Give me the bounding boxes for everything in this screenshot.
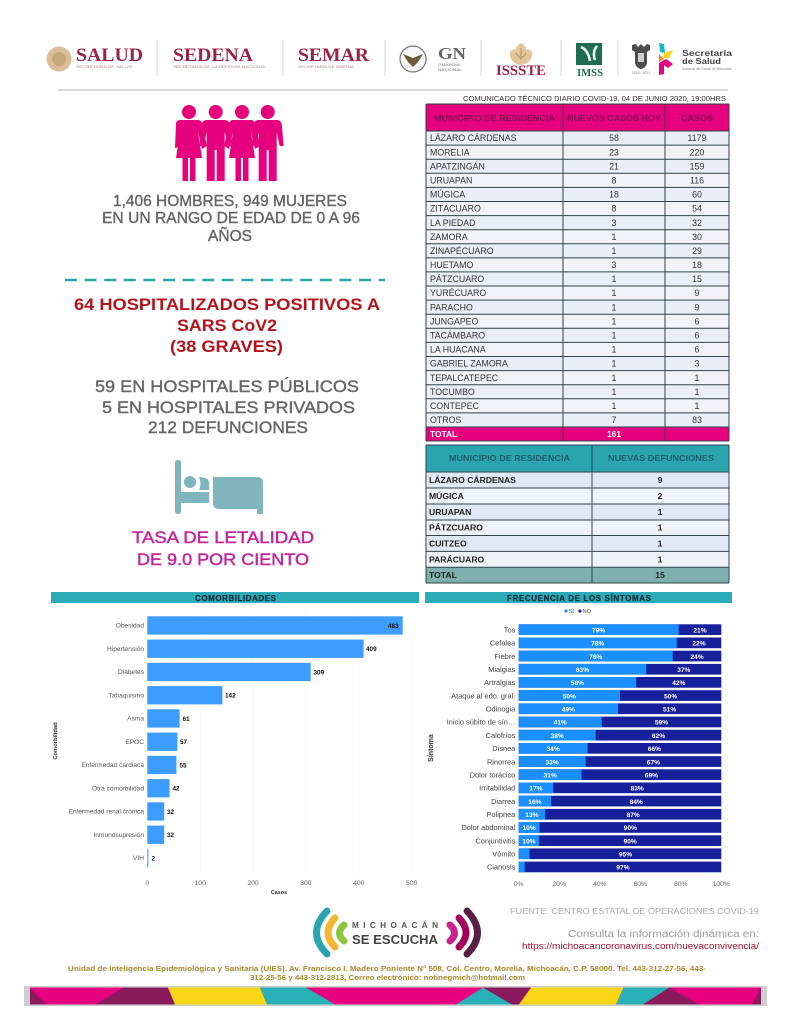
stacked bar chart: síntomas: 41% [554,720,567,727]
stacked bar chart: síntomas [428,624,730,888]
stacked bar chart: síntomas: 50% [563,693,576,700]
table: casos por municipio: TEPALCATEPEC [430,373,499,383]
text: hospitales y defunciones: 5 EN HOSPITALES PRIVADOS [102,398,355,417]
table: casos por municipio: 1 [612,330,617,340]
stacked bar chart: síntomas: Mialgias [488,665,516,674]
text: consulta la información: Consulta la información dinámica en: [568,929,759,940]
table: casos por municipio: MÚGICA [430,190,465,200]
stacked bar chart: síntomas: Fiebre [494,652,515,661]
table: nuevas defunciones: 9 [658,475,663,485]
bar chart: comorbilidades: 32 [167,809,175,816]
stacked bar chart: síntomas: Calofríos [486,731,516,740]
table: casos por municipio: PARACHO [430,302,473,312]
logo: Salud [46,46,143,72]
table: casos por municipio: ZITÁCUARO [430,204,481,214]
logo: IMSS [576,43,603,79]
decorative stripe [24,986,767,1006]
bar chart: comorbilidades: Enfermedad cardiaca [81,762,144,769]
table: casos por municipio: 1 [695,373,700,383]
table: casos por municipio: 1 [612,401,617,411]
stacked bar chart: síntomas: 17% [529,786,543,793]
text: hospitalizados: SARS CoV2 [177,316,277,335]
table: casos por municipio: 1 [612,232,617,242]
table: casos por municipio: 29 [692,246,702,256]
table: casos por municipio: LÁZARO CÁRDENAS [430,133,517,143]
bar chart: comorbilidades: 55 [180,762,187,770]
table: casos por municipio: 1 [612,359,617,369]
bar chart: comorbilidades: Inmunosupresión [93,832,144,839]
stacked bar chart: síntomas: Dolor abdominal [461,823,516,832]
table: casos por municipio: CASOS [681,113,713,123]
stacked bar chart: síntomas: 90% [624,838,637,845]
table: casos por municipio: 23 [609,147,619,157]
table: casos por municipio: CONTEPEC [430,401,480,411]
table: nuevas defunciones: PÁTZCUARO [429,522,483,532]
table: casos por municipio: 7 [612,415,617,425]
logo: ISSSTE: ISSSTE [496,63,546,79]
table: casos por municipio: TACÁMBARO [430,330,485,340]
heading: frecuencia de los síntomas: FRECUENCIA DE LOS SÍNTOMAS [507,594,652,603]
bar chart: comorbilidades: EPOC [125,739,144,746]
table: casos por municipio: 220 [690,147,704,157]
table: casos por municipio: MUNICIPIO DE RESIDENCIA [434,113,555,123]
stacked bar chart: síntomas: 58% [571,680,584,687]
bar chart: comorbilidades: 500 [406,880,418,887]
table: casos por municipio: 3 [612,218,617,228]
stacked bar chart: síntomas: 37% [677,667,691,674]
stacked bar chart: síntomas: 42% [672,680,686,687]
table: casos por municipio: 1 [612,274,617,284]
table: casos por municipio: 8 [612,176,617,186]
table: casos por municipio: JUNGAPEO [430,316,479,326]
stacked bar chart: síntomas: 38% [551,733,564,740]
stacked bar chart: síntomas: 66% [648,746,661,753]
header logos [46,40,732,79]
stacked bar chart: síntomas: 21% [693,627,707,634]
bar chart: comorbilidades: 409 [366,646,377,653]
stacked bar chart: síntomas: 34% [546,746,560,753]
table: casos por municipio: 9 [695,288,700,298]
logo: Sedena: SEDENA [173,46,254,66]
table: casos por municipio: 1 [612,373,617,383]
logo: Michoacán shield: 2015 · 2021 [632,71,650,75]
stacked bar chart: síntomas: 40% [593,881,607,888]
date line: COMUNICADO TÉCNICO DIARIO COVID-19, 04 DE JUNIO 2020, 19:00HRS [463,94,726,103]
bar chart: comorbilidades: Enfermedad renal crónica [68,809,144,816]
text: enlace: https://michoacancoronavirus.com/nuevaconvivencia/ [522,941,759,952]
logo: Michoacán shield [632,44,650,75]
stacked bar chart: síntomas: 10% [522,825,536,832]
stacked bar chart: síntomas: 51% [663,706,676,714]
table: casos por municipio: 1 [612,387,617,397]
text: hombres y mujeres: AÑOS [208,225,252,245]
bar chart: comorbilidades: Otra comorbilidad [92,785,144,792]
heading: comorbilidades [51,592,419,603]
logo: Guardia Nacional: NACIONAL [438,67,463,72]
logo: Guardia Nacional: GUARDIA [438,62,460,67]
stacked bar chart: síntomas: 76% [589,654,602,661]
table: casos por municipio [426,104,729,441]
legend: SI NO: SI [568,609,574,615]
logo: IMSS: IMSS [577,67,603,79]
stacked bar chart: síntomas: 100% [713,881,730,888]
table: casos por municipio: 1 [612,288,617,298]
table: nuevas defunciones: MUNICIPIO DE RESIDENCIA [449,453,570,463]
stacked bar chart: síntomas: 69% [645,772,658,779]
bar chart: comorbilidades: Casos [271,890,287,896]
table: nuevas defunciones: 15 [655,570,665,580]
logo: ISSSTE [496,43,546,79]
logo: Secretaría de Salud mark: Secretaría [682,48,732,58]
table: casos por municipio: 83 [692,415,702,425]
table: casos por municipio: 3 [695,359,700,369]
stacked bar chart: síntomas: 63% [576,667,589,674]
table: nuevas defunciones: CUITZEO [429,538,467,548]
table: casos por municipio: LA PIEDAD [430,218,475,228]
stacked bar chart: síntomas: Cefalea [490,639,516,648]
table: casos por municipio: 1 [612,246,617,256]
table: casos por municipio: YURÉCUARO [430,288,486,298]
table: casos por municipio: 1 [695,387,700,397]
table: casos por municipio: 30 [692,232,702,242]
stacked bar chart: síntomas: 84% [630,799,643,806]
stacked bar chart: síntomas: 16% [528,799,542,806]
stacked bar chart: síntomas: 67% [647,759,660,766]
stacked bar chart: síntomas: 33% [545,759,559,766]
stacked bar chart: síntomas: Artralgias [484,678,516,687]
icon: bed [175,460,263,514]
text: dirección: 312-25-56 y 443-312-2813, Correo electrónico: notinegmich@hotmail.com [250,973,525,982]
text: tasa de letalidad: TASA DE LETALIDAD [132,528,314,547]
bar chart: comorbilidades: 61 [182,716,190,723]
stacked bar chart: síntomas: 90% [624,825,637,832]
table: casos por municipio: 1 [695,401,700,411]
table: casos por municipio: 161 [607,429,621,439]
bar chart: comorbilidades: Tabaquismo [108,692,144,699]
table: nuevas defunciones [426,445,729,583]
table: casos por municipio: 6 [695,316,700,326]
heading: frecuencia de los síntomas [425,592,732,603]
table: nuevas defunciones: NUEVAS DEFUNCIONES [608,453,714,463]
table: casos por municipio: NUEVOS CASOS HOY [567,113,661,123]
bar chart: comorbilidades: 32 [167,832,175,839]
table: casos por municipio: 8 [612,204,617,214]
table: casos por municipio: 116 [690,176,704,186]
stacked bar chart: síntomas: Inicio súbito de sín… [447,718,515,727]
table: casos por municipio: OTROS [430,415,461,425]
legend: SI NO: NO [582,609,592,615]
logo: Michoacán se escucha [316,911,478,954]
table: nuevas defunciones: 1 [658,538,663,548]
table: casos por municipio: 54 [692,204,702,214]
bar chart: comorbilidades: Asma [127,716,144,723]
logo: Salud: SECRETARÍA DE SALUD [76,65,133,69]
table: casos por municipio: APATZINGÁN [430,161,485,171]
stacked bar chart: síntomas: Tos [504,625,516,634]
table: casos por municipio: 15 [692,274,702,284]
stacked bar chart: síntomas: Conjuntivitis [475,836,516,845]
stacked bar chart: síntomas: Polipnea [487,810,516,819]
table: casos por municipio: TOCUMBO [430,387,475,397]
table: casos por municipio: 1 [612,316,617,326]
bar chart: comorbilidades: 400 [353,880,365,887]
stacked bar chart: síntomas: 0% [514,881,524,888]
table: casos por municipio: 18 [609,190,619,200]
text: hospitalizados [74,295,380,356]
bar chart: comorbilidades: Diabetes [118,669,145,676]
table: casos por municipio: MORELIA [430,147,470,157]
bar chart: comorbilidades: Obesidad [116,623,144,630]
text: dirección: Unidad de Inteligencia Epidemiológica y Sanitaria (UIES). Av. Francisco I. Madero Poniente N° 508, Col. Centro, Morelia, Michoacán, C.P. 58000. Tel. 443-312-27-56, 443- [68,964,706,973]
table: casos por municipio: HUETAMO [430,260,473,270]
stacked bar chart: síntomas: Odinogia [486,704,516,714]
heading: comorbilidades: COMORBILIDADES [195,594,277,603]
stacked bar chart: síntomas: Ataque al edo. gral. [451,691,515,700]
table: casos por municipio: 9 [695,302,700,312]
logo: Secretaría de Salud mark [659,43,732,75]
table: nuevas defunciones: 1 [658,554,663,564]
table: nuevas defunciones: MÚGICA [429,490,464,501]
stacked bar chart: síntomas: Cianosis [487,863,516,872]
text: tasa de letalidad: DE 9.0 POR CIENTO [137,550,309,569]
text: hospitales y defunciones: 59 EN HOSPITALES PÚBLICOS [95,377,359,396]
stacked bar chart: síntomas: 31% [543,772,557,779]
table: casos por municipio: URUAPAN [430,176,472,186]
logo: Sedena: SECRETARÍA DE LA DEFENSA NACIONAL [173,65,266,69]
stacked bar chart: síntomas: Irritabilidad [479,784,515,793]
table: casos por municipio: GABRIEL ZAMORA [430,359,508,369]
logo: Secretaría de Salud mark: de Salud [682,56,721,66]
stacked bar chart: síntomas: Disnea [492,744,516,753]
table: casos por municipio: 60 [692,190,702,200]
stacked bar chart: síntomas: Diarrea [491,797,516,806]
stacked bar chart: síntomas: 22% [692,641,706,648]
logo: Salud: SALUD [76,46,143,66]
bar chart: comorbilidades: VIH [133,855,144,862]
icon: four people [175,105,284,181]
table: casos por municipio: 1179 [688,133,707,143]
stacked bar chart: síntomas: 97% [616,865,630,872]
table: casos por municipio: ZAMORA [430,232,468,242]
stacked bar chart: síntomas: Dolor torácico [470,770,515,779]
text: hospitalizados: (38 GRAVES) [170,337,283,356]
table: nuevas defunciones: 1 [658,522,663,532]
bar chart: comorbilidades: 309 [314,670,325,676]
text: hombres y mujeres [102,193,360,245]
bar chart: comorbilidades: 57 [180,739,188,746]
table: casos por municipio: PÁTZCUARO [430,274,484,284]
bar chart: comorbilidades: 200 [247,880,259,887]
bar chart: comorbilidades: 142 [225,693,236,700]
stacked bar chart: síntomas: 95% [619,852,632,858]
text: hombres y mujeres: 1,406 HOMBRES, 949 MUJERES [113,193,347,210]
table: nuevas defunciones: PARÁCUARO [429,554,485,564]
stacked bar chart: síntomas: 10% [522,838,536,845]
stacked bar chart: síntomas: 60% [633,881,647,888]
stacked bar chart: síntomas: 24% [690,654,704,661]
table: casos por municipio: 18 [692,260,702,270]
logo: Guardia Nacional [400,44,467,72]
table: nuevas defunciones: LÁZARO CÁRDENAS [429,475,516,485]
table: nuevas defunciones: URUAPAN [429,507,471,517]
bar chart: comorbilidades: Hipertensión [107,646,144,653]
stacked bar chart: síntomas: 87% [627,812,640,819]
bar chart: comorbilidades: 100 [195,880,206,887]
text: dirección [68,964,706,982]
logo: Guardia Nacional: GN [438,44,467,63]
table: nuevas defunciones: TOTAL [429,570,457,580]
stacked bar chart: síntomas: 62% [652,733,665,740]
table: casos por municipio: ZINAPÉCUARO [430,246,494,256]
table: casos por municipio: TOTAL [430,429,457,439]
bar chart: comorbilidades: 483 [388,623,399,630]
stacked bar chart: síntomas: 78% [591,641,604,648]
text: hospitalizados: 64 HOSPITALIZADOS POSITIVOS A [74,295,380,314]
table: casos por municipio: 6 [695,330,700,340]
text: tasa de letalidad [132,528,314,569]
text: fuente: FUENTE: CENTRO ESTATAL DE OPERACIONES COVID-19 [510,906,759,916]
stacked bar chart: síntomas: 80% [674,881,688,888]
text: hospitales y defunciones [95,377,359,437]
logo: Michoacán se escucha: MICHOACÁN [352,920,438,930]
stacked bar chart: síntomas: 49% [562,706,575,714]
table: casos por municipio: 6 [695,345,700,355]
table: casos por municipio: LA HUACANA [430,345,486,355]
table: casos por municipio: 32 [692,218,702,228]
stacked bar chart: síntomas: 79% [592,627,605,634]
bar chart: comorbilidades: 0 [145,880,149,887]
text: hospitales y defunciones: 212 DEFUNCIONES [148,418,308,437]
stacked bar chart: síntomas: Síntoma [428,734,435,762]
stacked bar chart: síntomas: 83% [631,786,644,793]
table: casos por municipio: 1 [612,302,617,312]
table: casos por municipio: 21 [609,161,619,171]
stacked bar chart: síntomas: Vómito [492,850,515,858]
legend: SI NO [564,609,592,615]
logo: Secretaría de Salud mark: Gobierno del Estado de Michoacán [682,67,732,71]
table: nuevas defunciones: 2 [658,491,663,501]
table: casos por municipio: 1 [612,345,617,355]
table: casos por municipio: 3 [612,260,617,270]
bar chart: comorbilidades: 2 [152,856,156,862]
table: casos por municipio: 159 [690,161,704,171]
logo: Michoacán se escucha: SE ESCUCHA [352,932,439,947]
table: nuevas defunciones: 1 [658,507,663,517]
stacked bar chart: síntomas: 20% [552,881,566,888]
logo: Semar: SEMAR [298,46,370,66]
bar chart: comorbilidades: Comorbilidad [53,722,59,760]
table: casos por municipio: 58 [609,133,619,143]
stacked bar chart: síntomas: 59% [655,720,668,727]
bar chart: comorbilidades: 300 [300,880,312,887]
bar chart: comorbilidades [53,612,418,896]
logo: Semar: SECRETARÍA DE MARINA [298,65,355,69]
stacked bar chart: síntomas: 50% [664,693,677,700]
stacked bar chart: síntomas: 13% [525,812,539,819]
bar chart: comorbilidades: 42 [172,786,180,793]
stacked bar chart: síntomas: Rinorrea [487,757,516,766]
text: hombres y mujeres: EN UN RANGO DE EDAD DE 0 A 96 [102,210,360,227]
